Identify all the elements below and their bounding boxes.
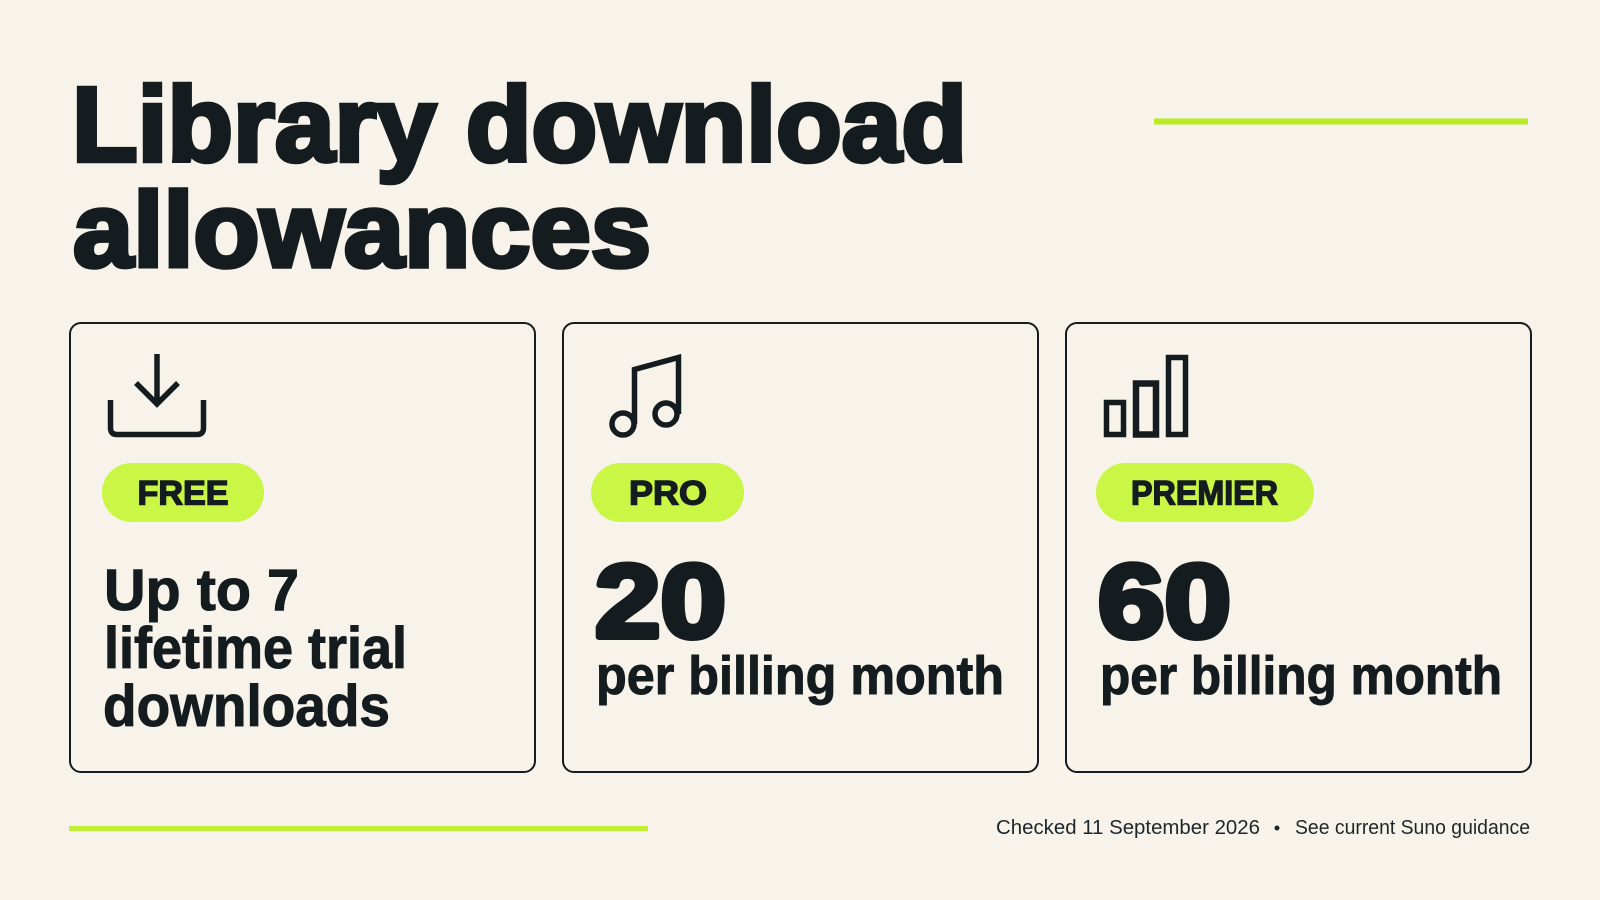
allowance text: free: [103, 558, 407, 739]
footer note: Checked 11 September 2026: [996, 816, 1260, 839]
footer note: [996, 816, 1530, 839]
allowance unit: pro: per billing month: [596, 646, 1004, 706]
title: [72, 66, 967, 290]
allowance number: pro: 20: [595, 544, 726, 660]
icon: bar chart: [1106, 358, 1186, 434]
badge: free: [102, 463, 264, 522]
title: Library download: [72, 66, 967, 184]
footer note: See current Suno guidance: [1295, 816, 1530, 839]
allowance unit: premier: per billing month: [1100, 646, 1502, 706]
icon: download: [110, 354, 204, 434]
title: allowances: [73, 172, 651, 290]
panel: free: [70, 323, 535, 772]
accent line: bottom left: [69, 826, 648, 831]
allowance text: free: downloads: [103, 674, 390, 739]
panel: premier: [1066, 323, 1531, 772]
badge: premier: PREMIER: [1131, 474, 1278, 512]
panel: pro: [563, 323, 1038, 772]
allowance text: free: Up to 7: [104, 558, 299, 623]
allowance text: free: lifetime trial: [104, 616, 407, 681]
icon: music note: [612, 358, 678, 435]
allowance number: premier: 60: [1098, 544, 1231, 660]
badge: pro: [591, 463, 744, 522]
badge: free: FREE: [138, 474, 228, 512]
badge: premier: [1096, 463, 1314, 522]
accent line: top right: [1154, 118, 1528, 124]
badge: pro: PRO: [629, 474, 707, 512]
